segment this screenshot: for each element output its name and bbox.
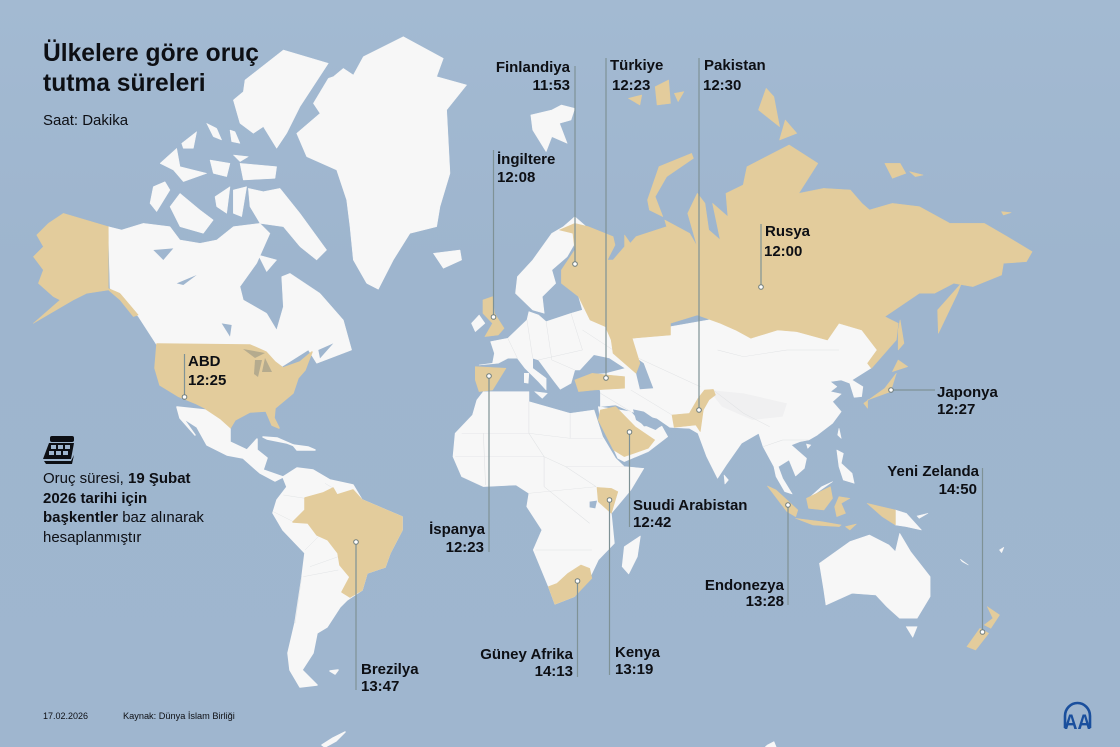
label: Pakistan: [697, 57, 766, 412]
title: [43, 40, 259, 97]
label: Finlandiya: [496, 59, 577, 266]
map: Tibet shading: [709, 390, 787, 420]
label: Japonya: Japonya: [937, 384, 999, 401]
label: Kenya: [607, 498, 661, 678]
label: İngiltere: 12:08: [497, 169, 535, 186]
label: Brezilya: 13:47: [361, 678, 399, 695]
label: Japonya: 12:27: [937, 401, 975, 418]
map: Asia borders: [600, 350, 839, 447]
label: Finlandiya: 11:53: [532, 77, 570, 94]
map: Pakistan, Indonesia, New Zealand (tan): [672, 389, 999, 650]
label: Kenya: 13:19: [615, 661, 653, 678]
note text: 2026 tarihi için: [43, 490, 147, 507]
note text: [43, 470, 204, 546]
label: Yeni Zelanda: [887, 463, 985, 634]
title: Ülkelere göre oruç: [43, 40, 259, 67]
title: tutma süreleri: [43, 70, 206, 97]
map: great lakes: [243, 349, 272, 377]
label: İspanya: 12:23: [446, 539, 484, 556]
label: Güney Afrika: Güney Afrika: [480, 646, 574, 663]
subtitle: Saat: Dakika: [43, 112, 129, 129]
label: Brezilya: [354, 540, 419, 695]
label: Türkiye: 12:23: [612, 77, 650, 94]
label: Türkiye: Türkiye: [610, 57, 663, 74]
source: Kaynak: Dünya İslam Birliği: [123, 711, 235, 721]
label: Rusya: Rusya: [765, 223, 811, 240]
label: Yeni Zelanda: Yeni Zelanda: [887, 463, 980, 480]
label: Güney Afrika: 14:13: [535, 663, 573, 680]
AA logo: AA: [1064, 711, 1091, 734]
label: İngiltere: İngiltere: [497, 151, 555, 168]
label: Suudi Arabistan: Suudi Arabistan: [633, 497, 747, 514]
label: Kenya: Kenya: [615, 644, 661, 661]
note text: başkentler baz alınarak: [43, 509, 204, 526]
label: Suudi Arabistan: [627, 430, 747, 531]
map: Brazil (tan): [293, 488, 402, 597]
map: Europe: [471, 105, 640, 398]
label: Endonezya: 13:28: [746, 593, 784, 610]
label: Yeni Zelanda: 14:50: [939, 481, 977, 498]
label: Brezilya: Brezilya: [361, 661, 419, 678]
map: Latin America: [177, 407, 402, 747]
map: North America and Arctic: [33, 37, 467, 370]
label: ABD: [182, 353, 226, 399]
date: 17.02.2026: [43, 711, 88, 721]
label: ABD: ABD: [188, 353, 221, 370]
label: Pakistan: 12:30: [703, 77, 741, 94]
map: USA (tan): [155, 344, 312, 430]
map: Russia and Finland (tan): [475, 80, 1032, 408]
label: Endonezya: Endonezya: [705, 577, 785, 594]
label: Güney Afrika: [480, 579, 580, 680]
note text: hesaplanmıştır: [43, 529, 141, 546]
label: Rusya: 12:00: [764, 243, 802, 260]
label: Suudi Arabistan: 12:42: [633, 514, 671, 531]
icon: calendar: [43, 436, 74, 464]
label: Pakistan: Pakistan: [704, 57, 766, 74]
label: ABD: 12:25: [188, 372, 226, 389]
label: İspanya: İspanya: [429, 521, 486, 538]
map: Gulf and Caspian water: [632, 355, 653, 389]
label: Rusya: [759, 223, 811, 289]
map: Asia: [592, 310, 1004, 747]
label: Japonya: [889, 384, 999, 418]
map: South America borders: [273, 483, 338, 623]
label: İspanya: [429, 374, 491, 556]
label: Finlandiya: Finlandiya: [496, 59, 571, 76]
AA logo: [1064, 703, 1091, 734]
label: Endonezya: [705, 503, 790, 610]
note text: Oruç süresi, 19 Şubat: [43, 470, 191, 487]
label: Türkiye: [604, 57, 663, 380]
label: İngiltere: [491, 150, 555, 319]
map: Africa: [453, 392, 663, 604]
